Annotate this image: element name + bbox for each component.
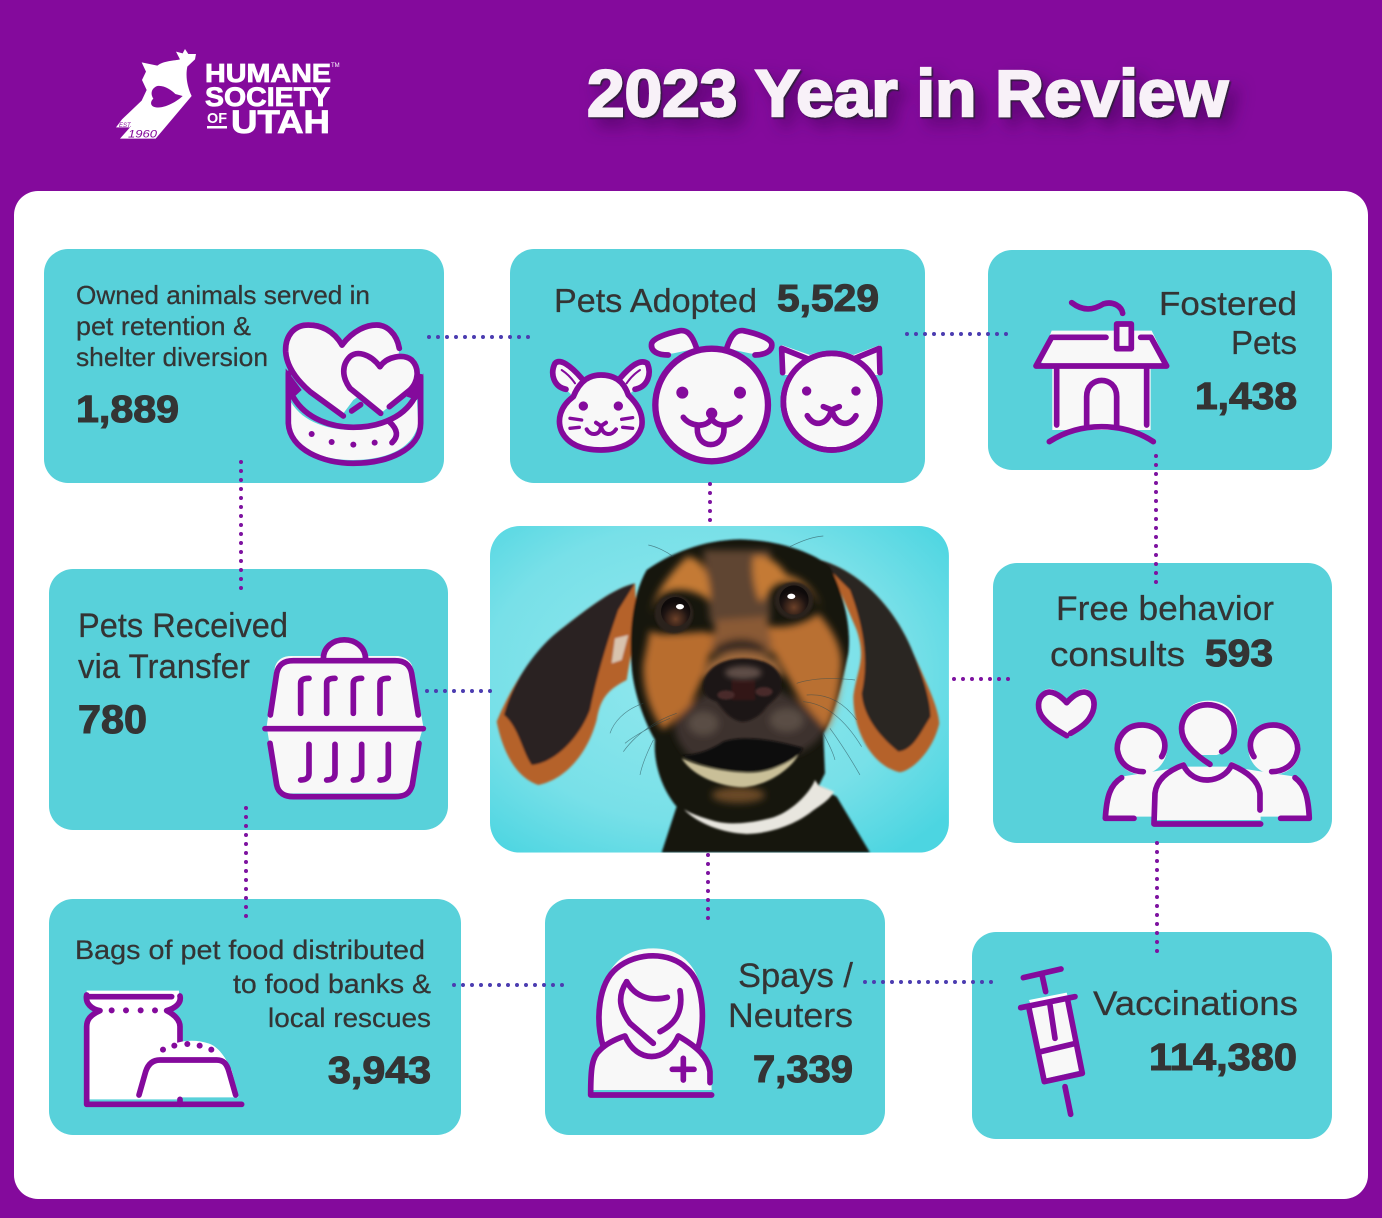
logo trademark: TM <box>331 63 340 69</box>
logo word HUMANE: HUMANE <box>205 58 331 88</box>
description text: pet retention & <box>76 311 251 341</box>
eyes <box>661 585 809 626</box>
photo background <box>490 526 949 853</box>
logo: Humane Society of Utah <box>116 49 340 140</box>
panel background <box>988 250 1332 470</box>
label: Neuters <box>728 997 853 1035</box>
panel background <box>49 899 461 1135</box>
description text: shelter diversion <box>76 342 268 372</box>
number 1,438: 1,438 <box>1195 376 1297 418</box>
connector: transfer to photo <box>427 689 492 693</box>
connector: fostered to behavior <box>1154 456 1158 590</box>
number 114,380: 114,380 <box>1149 1037 1297 1079</box>
label: Fostered <box>1159 285 1297 322</box>
panel background <box>545 899 885 1135</box>
label: Spays / <box>738 957 854 995</box>
label: via Transfer <box>78 648 250 686</box>
label: Pets Adopted <box>554 282 757 319</box>
icon: syringe <box>1021 969 1082 1114</box>
logo mark: dog silhouette with heart <box>116 49 196 139</box>
connector: photo to spays <box>706 855 710 919</box>
number 3,943: 3,943 <box>328 1050 431 1092</box>
panel background <box>510 249 925 483</box>
logo: Humane Society of Utah: 1960 <box>128 128 158 140</box>
icon: rabbit, dog and cat faces <box>553 329 881 462</box>
panel background <box>44 249 444 483</box>
label <box>728 957 854 1035</box>
title: 2023 Year in Review <box>587 56 1229 130</box>
number 780: 780 <box>78 698 147 742</box>
panel: vaccinations <box>972 932 1332 1139</box>
description text: to food banks & <box>233 969 431 999</box>
description text: Owned animals served in <box>76 280 370 310</box>
description text <box>76 280 370 372</box>
label: Vaccinations <box>1093 985 1298 1023</box>
panel: free behavior consults <box>993 563 1332 843</box>
whiskers <box>610 536 862 775</box>
panel: bags of pet food <box>49 899 461 1135</box>
connector: adopted to photo <box>708 484 712 524</box>
dog <box>651 329 772 462</box>
panel background <box>49 569 448 830</box>
connector: food to spays <box>454 983 570 987</box>
label: Pets <box>1231 324 1297 361</box>
logo word underline <box>207 126 227 128</box>
connector: owned animals to adopted <box>429 335 530 339</box>
icon: house with chimney <box>1036 303 1167 442</box>
description text: Bags of pet food distributed <box>75 935 425 965</box>
label <box>78 607 288 686</box>
icon: food bag and bowl <box>86 991 242 1104</box>
description text: local rescues <box>268 1003 431 1033</box>
icon: pet carrier <box>265 638 423 797</box>
icon: hearts over pet collar <box>285 322 423 463</box>
nose highlight <box>725 666 762 679</box>
number 5,529: 5,529 <box>777 278 879 320</box>
cat <box>782 345 881 450</box>
rabbit <box>553 360 649 450</box>
dog ears <box>497 539 939 853</box>
panel: pets received via transfer <box>49 569 448 830</box>
panel background <box>993 563 1332 843</box>
label: Pets Received <box>78 607 288 645</box>
mouth, chin, collar and nose <box>655 582 834 834</box>
label <box>1050 590 1274 674</box>
dotted connector lines <box>241 334 1157 985</box>
label: consults <box>1050 636 1185 674</box>
face colour patches <box>643 550 842 803</box>
photo: puppy on turquoise background <box>490 526 949 853</box>
logo word UTAH: UTAH <box>231 104 330 140</box>
logo word OF: OF <box>207 110 227 127</box>
label <box>1159 285 1297 361</box>
panel: fostered pets <box>988 250 1332 470</box>
icon: heart and three people <box>1039 689 1310 824</box>
connector: transfer to food <box>244 808 248 919</box>
number 1,889: 1,889 <box>76 389 179 431</box>
number 7,339: 7,339 <box>753 1049 853 1091</box>
nostrils <box>717 687 773 700</box>
panel: spays and neuters <box>545 899 885 1135</box>
panel: owned animals served <box>44 249 444 483</box>
connector: behavior to vaccinations <box>1155 843 1159 952</box>
connector: adopted to fostered <box>907 332 1010 336</box>
connector: owned animals to transfer <box>239 462 243 597</box>
label: Free behavior <box>1056 590 1274 628</box>
panel: pets adopted <box>510 249 925 483</box>
connector: spays to vaccinations <box>865 980 997 984</box>
number 593: 593 <box>1205 633 1273 675</box>
logo est. date: EST. <box>119 123 132 129</box>
connector: photo to behavior <box>954 677 1014 681</box>
panel background <box>972 932 1332 1139</box>
description text <box>75 935 431 1033</box>
icon: veterinarian <box>591 948 712 1095</box>
logo word SOCIETY: SOCIETY <box>205 82 330 112</box>
